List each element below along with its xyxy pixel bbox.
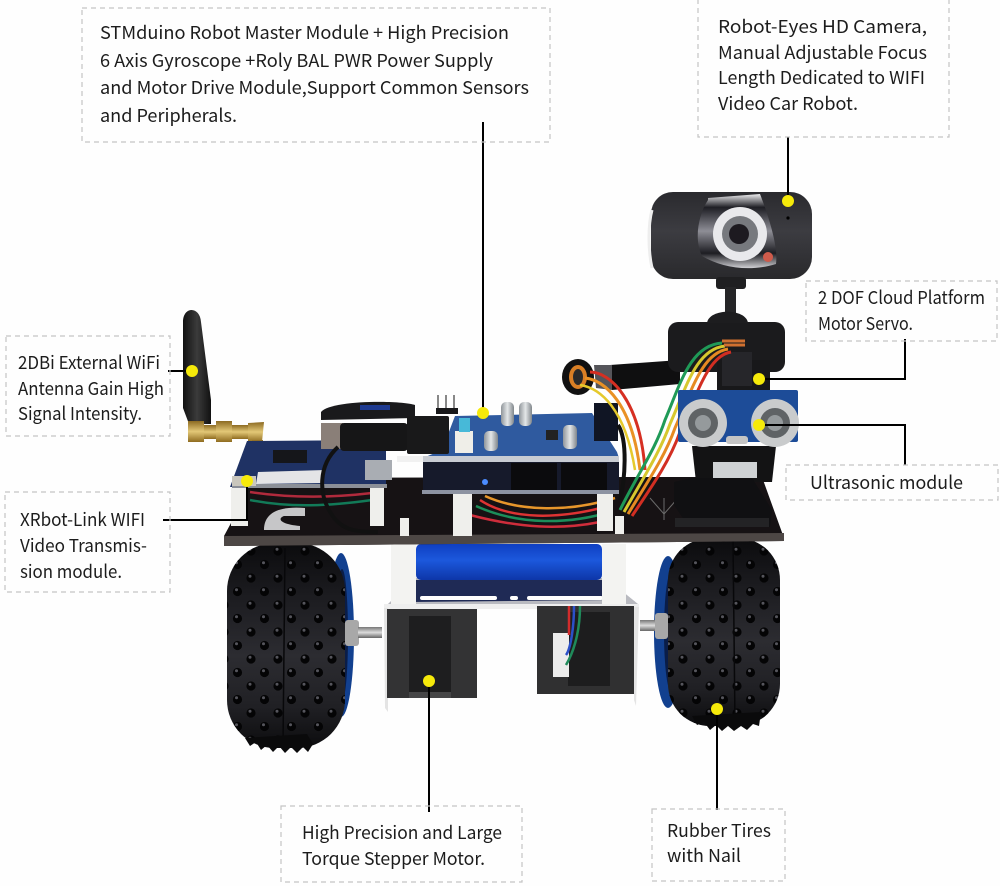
yellow marker dots: [186, 195, 794, 715]
callout: WiFi video module: Video Transmis-: [20, 532, 147, 558]
wires between plates: [250, 492, 615, 527]
antenna: [183, 310, 264, 454]
pan tilt clamp: [668, 322, 785, 390]
axles: [345, 613, 668, 646]
callout: camera: Manual Adjustable Focus: [718, 39, 927, 65]
callout: antenna: 2DBi External WiFi: [18, 349, 160, 375]
lower controller board with headers: [397, 456, 619, 494]
USB plug, jack and cable: [321, 402, 449, 532]
callout: ultrasonic module: [786, 465, 998, 500]
robot illustration: [183, 192, 812, 753]
callout: WiFi video module: XRbot-Link WIFI: [20, 506, 145, 532]
callout: antenna: [6, 336, 170, 436]
callout: antenna: Signal Intensity.: [18, 400, 142, 426]
callout: antenna: Antenna Gain High: [18, 375, 164, 401]
callout: rubber tires: with Nail: [667, 842, 741, 868]
callout: master module: and Peripherals.: [100, 102, 237, 128]
servo loop and arm: [562, 359, 680, 500]
main chassis plate: [224, 477, 784, 546]
callout: stepper motor: High Precision and Large: [302, 819, 502, 845]
callout: cloud platform servo: 2 DOF Cloud Platform: [818, 284, 985, 310]
callout lines: [163, 122, 905, 812]
left tire: [227, 543, 354, 753]
standoffs: [231, 487, 624, 536]
callout: camera: Video Car Robot.: [718, 90, 858, 116]
callout: camera: [698, 0, 949, 137]
ultrasonic sensor: [678, 390, 799, 447]
webcam: [649, 192, 812, 279]
battery and standoffs: [391, 544, 626, 604]
callout: rubber tires: Rubber Tires: [667, 817, 771, 843]
right tire: [654, 538, 780, 731]
callout: master module: 6 Axis Gyroscope +Roly BAL PWR Power Supply: [100, 47, 494, 73]
upper master board: [423, 395, 619, 462]
motor bracket: [384, 578, 639, 712]
callout: cloud platform servo: Motor Servo.: [818, 310, 913, 336]
left stepper motor: [387, 609, 477, 698]
callout: camera: Robot-Eyes HD Camera,: [718, 13, 927, 39]
ultrasonic mount: [674, 446, 776, 527]
WiFi video transmission board: [230, 440, 392, 488]
callout: stepper motor: [281, 806, 522, 882]
callout: master module: and Motor Drive Module,Support Common Sensors: [100, 74, 529, 100]
right stepper motor: [537, 606, 634, 694]
callout: rubber tires: [652, 809, 785, 881]
callout: stepper motor: Torque Stepper Motor.: [302, 845, 485, 871]
callout: cloud platform servo: [806, 281, 997, 341]
callout: camera: Length Dedicated to WIFI: [718, 64, 925, 90]
callout: master module: STMduino Robot Master Module + High Precision: [100, 19, 509, 45]
rainbow servo wires: [620, 341, 745, 516]
callout: WiFi video module: sion module.: [20, 558, 122, 584]
callout: WiFi video module: [5, 492, 170, 592]
callout: master module: [82, 8, 550, 142]
webcam stem: [707, 277, 748, 323]
callout: ultrasonic module: Ultrasonic module: [810, 469, 963, 495]
